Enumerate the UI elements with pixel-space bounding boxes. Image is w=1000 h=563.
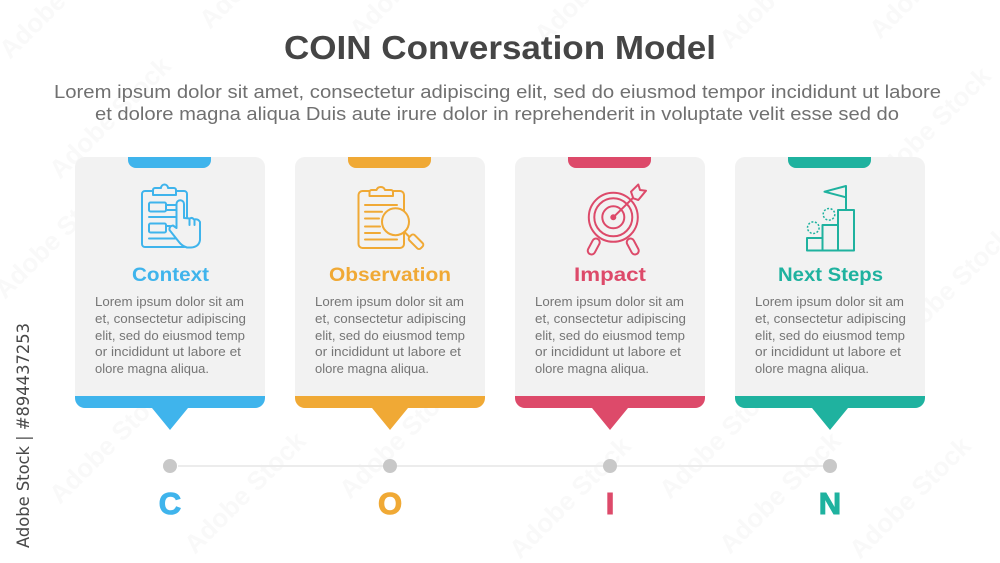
acronym letters bbox=[159, 486, 841, 521]
heading: observation: Observation bbox=[329, 265, 451, 286]
icon: stairs with flag bbox=[807, 186, 854, 250]
watermark pattern: Adobe Stock bbox=[43, 375, 177, 509]
stock id side label: Adobe Stock | #894437253 bbox=[14, 323, 34, 548]
body text: observation: elit, sed do eiusmod temp bbox=[315, 328, 465, 343]
watermark pattern: Adobe Stock bbox=[43, 50, 177, 184]
watermark pattern: Adobe Stock bbox=[503, 430, 637, 563]
panel: observation bbox=[295, 157, 485, 430]
body text: impact bbox=[535, 294, 686, 376]
body text: observation: et, consectetur adipiscing bbox=[315, 311, 466, 326]
panel: impact bbox=[515, 157, 705, 430]
title: COIN Conversation Model bbox=[284, 29, 716, 66]
speech pointer: impact bbox=[515, 396, 705, 430]
body text: next steps: et, consectetur adipiscing bbox=[755, 311, 906, 326]
speech pointer: next steps bbox=[735, 396, 925, 430]
icon: clipboard with pointing hand bbox=[142, 184, 200, 248]
body text: next steps: elit, sed do eiusmod temp bbox=[755, 328, 905, 343]
watermark pattern: Adobe Stock bbox=[333, 370, 467, 504]
heading: impact: Impact bbox=[574, 265, 647, 286]
body text: impact: olore magna aliqua. bbox=[535, 361, 649, 376]
body text: context: elit, sed do eiusmod temp bbox=[95, 328, 245, 343]
body text: impact: elit, sed do eiusmod temp bbox=[535, 328, 685, 343]
watermark pattern: Adobe Stock bbox=[713, 425, 847, 559]
icon: target with arrow bbox=[586, 184, 646, 256]
watermark pattern: Adobe Stock bbox=[178, 425, 312, 559]
acronym letters: I bbox=[606, 486, 614, 521]
body text: impact: et, consectetur adipiscing bbox=[535, 311, 686, 326]
body text: context: Lorem ipsum dolor sit am bbox=[95, 294, 244, 309]
body text: observation bbox=[315, 294, 466, 376]
panel: context bbox=[75, 157, 265, 430]
body text: context: or incididunt ut labore et bbox=[95, 344, 241, 359]
acronym letters: O bbox=[378, 486, 402, 521]
body text: next steps: Lorem ipsum dolor sit am bbox=[755, 294, 904, 309]
body text: observation: or incididunt ut labore et bbox=[315, 344, 461, 359]
body text: impact: Lorem ipsum dolor sit am bbox=[535, 294, 684, 309]
watermark pattern: Adobe Stock bbox=[843, 430, 977, 563]
subtitle paragraph: et dolore magna aliqua Duis aute irure dolor in reprehenderit in voluptate velit esse sed do bbox=[95, 104, 899, 124]
heading: next steps: Next Steps bbox=[778, 265, 883, 286]
icon: clipboard with magnifier bbox=[358, 187, 424, 250]
body text: observation: Lorem ipsum dolor sit am bbox=[315, 294, 464, 309]
acronym letters: C bbox=[159, 486, 181, 521]
body text: next steps: olore magna aliqua. bbox=[755, 361, 869, 376]
subtitle paragraph: Lorem ipsum dolor sit amet, consectetur adipiscing elit, sed do eiusmod tempor incididunt ut labore bbox=[54, 82, 941, 102]
acronym letters: N bbox=[819, 486, 841, 521]
watermark pattern: Adobe Stock bbox=[653, 370, 787, 504]
body text: next steps: or incididunt ut labore et bbox=[755, 344, 901, 359]
body text: context bbox=[95, 294, 246, 376]
body text: next steps bbox=[755, 294, 906, 376]
timeline with dots bbox=[163, 459, 837, 473]
speech pointer: context bbox=[75, 396, 265, 430]
body text: context: olore magna aliqua. bbox=[95, 361, 209, 376]
body text: context: et, consectetur adipiscing bbox=[95, 311, 246, 326]
speech pointer: observation bbox=[295, 396, 485, 430]
body text: impact: or incididunt ut labore et bbox=[535, 344, 681, 359]
heading: context: Context bbox=[132, 265, 210, 286]
watermark pattern: Adobe Stock bbox=[863, 60, 997, 194]
panel: next steps bbox=[735, 157, 925, 430]
body text: observation: olore magna aliqua. bbox=[315, 361, 429, 376]
subtitle paragraph bbox=[54, 82, 941, 124]
